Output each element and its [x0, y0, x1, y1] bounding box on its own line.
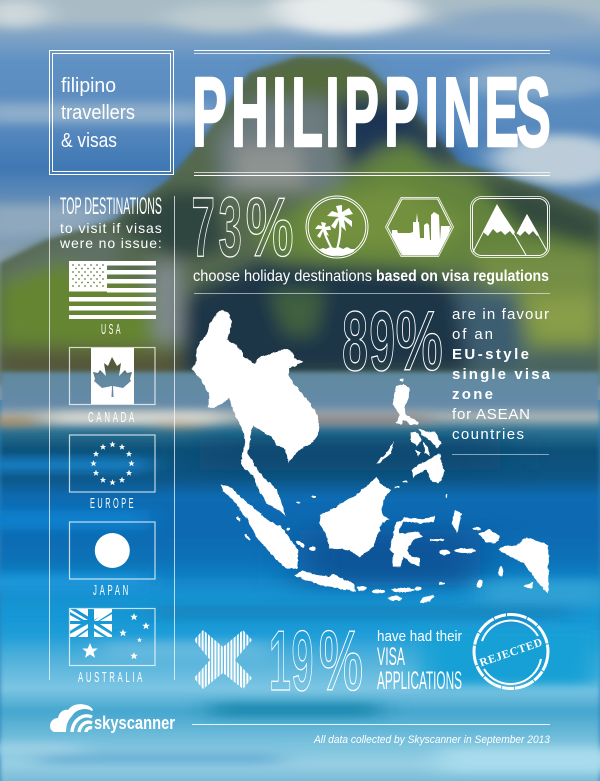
text: visa applications: VISA [377, 643, 405, 671]
logo: Skyscanner: skyscanner [94, 713, 175, 733]
flag: Europe [70, 435, 155, 512]
text: APPLICATIONS [377, 667, 462, 695]
subtitle text: & visas [61, 130, 117, 152]
divider and footer note: All data collected by Skyscanner in September 2013 [313, 734, 550, 746]
text: EU visa zone: EU-style [452, 346, 529, 363]
text: EU visa zone [452, 306, 551, 443]
stat caption: visa regulations [193, 268, 549, 285]
text: EU visa zone: of an [452, 326, 493, 343]
flag: Japan [70, 522, 155, 599]
stat caption: visa regulations: based on visa regulations [376, 268, 549, 285]
panel: subtitle box [50, 50, 174, 174]
icon: striped X [194, 630, 252, 689]
stat: 89 percent: 89 [342, 296, 395, 389]
icon: mountains [470, 196, 550, 258]
stat: 89 percent: % [396, 293, 443, 388]
map: Southeast Asia [192, 310, 548, 605]
icon: rejected stamp: REJECTED [478, 637, 545, 669]
stat: 73 percent [192, 180, 550, 275]
flag: Japan: JAPAN [93, 583, 131, 599]
stat: 19 percent [269, 613, 363, 709]
text: EU visa zone: zone [452, 386, 493, 403]
text: EU visa zone: single visa [452, 366, 551, 383]
icon: palm beach [306, 196, 368, 258]
sidebar subheading [59, 220, 163, 251]
icon: rejected stamp [474, 614, 548, 688]
flag: Australia [70, 608, 155, 686]
flag: USA [69, 261, 156, 338]
stat: 19 percent: % [319, 613, 363, 708]
flag: Australia: AUSTRALIA [78, 670, 145, 686]
flag: Europe: EUROPE [90, 496, 136, 512]
sidebar subheading: were no issue: [59, 235, 163, 251]
subtitle text: travellers [61, 102, 135, 124]
subtitle text [61, 75, 135, 152]
flag: Canada [70, 348, 155, 426]
title: Philippines: PHILIPPINES [192, 57, 551, 167]
icon: city skyline [386, 198, 454, 256]
text: TOP DESTINATIONS [60, 193, 162, 220]
stat caption: visa regulations: choose holiday destinations [193, 268, 372, 285]
stat: 89 percent [342, 293, 551, 455]
text: EU visa zone: for ASEAN [452, 406, 530, 423]
flag: USA: USA [101, 322, 123, 338]
flag: Canada: CANADA [88, 410, 137, 426]
sidebar subheading: to visit if visas [60, 220, 163, 236]
logo: Skyscanner [50, 704, 175, 733]
stat: 73 percent: 73 [192, 181, 242, 275]
text: EU visa zone: countries [452, 426, 524, 443]
stat: 19 percent: 19 [269, 614, 313, 709]
panel: top destinations sidebar [49, 193, 175, 686]
subtitle text: filipino [61, 75, 116, 97]
stat: 73 percent: % [246, 180, 294, 274]
text: visa applications [377, 628, 462, 695]
icon: cloud [50, 704, 93, 732]
text: EU visa zone: are in favour [452, 306, 549, 323]
text: visa applications: have had their [377, 628, 462, 645]
